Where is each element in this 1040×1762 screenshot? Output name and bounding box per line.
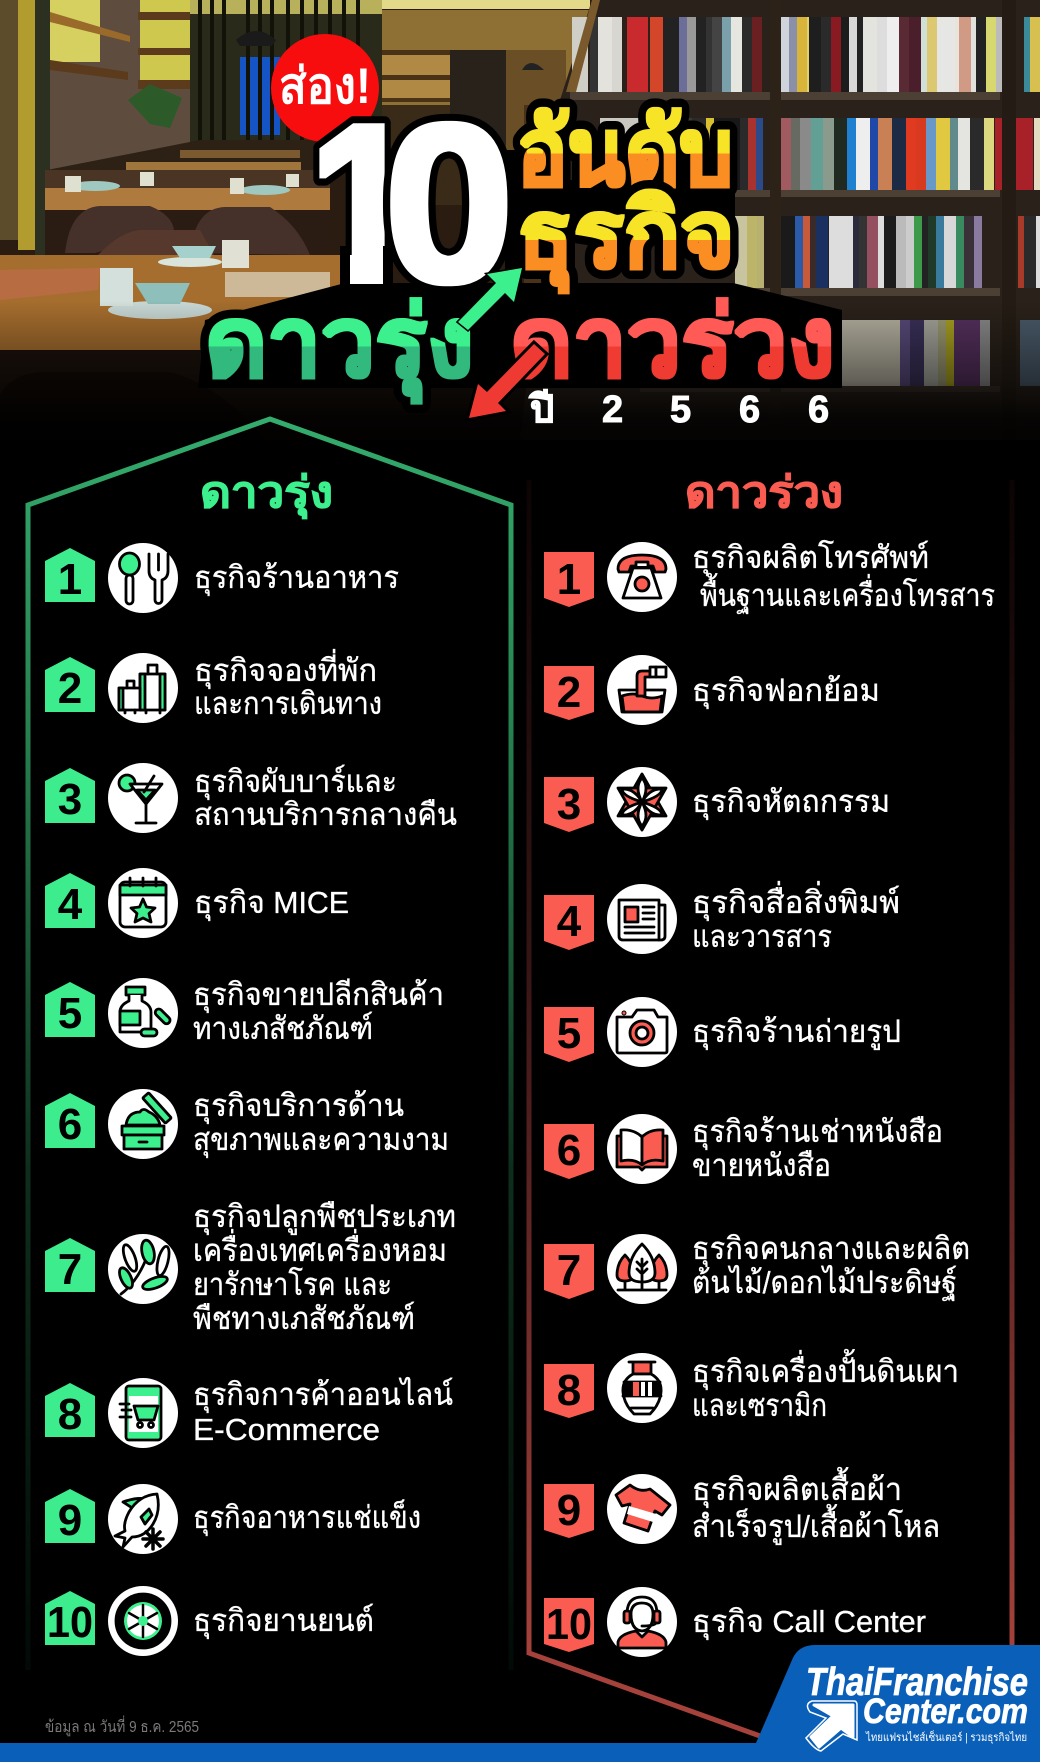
icon: cream jar (108, 1089, 178, 1159)
arrow: down (469, 344, 545, 418)
title: 10: 0 (384, 77, 514, 329)
arrow: up (458, 268, 522, 330)
icon: medicine (108, 978, 178, 1048)
rank badge 10: 10 (546, 1600, 592, 1649)
rank badge 9 (45, 1489, 95, 1545)
rank badge 3 (45, 768, 95, 824)
label: พื้นฐานและเครื่องโทรสาร (700, 573, 995, 614)
icon: newspaper (607, 884, 677, 954)
label: ธุรกิจขายปลีกสินค้า (193, 977, 444, 1014)
rank badge 8 (45, 1383, 95, 1439)
rank badge 2 (45, 657, 95, 713)
rank badge 1 (45, 548, 95, 604)
label (193, 1088, 449, 1159)
panel: falling stars list (544, 540, 995, 1657)
label: และการเดินทาง (194, 686, 382, 721)
item 9 (45, 1484, 421, 1554)
rank badge 6: 6 (58, 1100, 82, 1149)
title: อันดับ: อันดับ (517, 100, 733, 205)
label: ธุรกิจฟอกย้อม (692, 673, 880, 710)
dark fade to black (0, 300, 1040, 490)
item 2 (45, 649, 382, 723)
rank badge 1: 1 (58, 555, 82, 604)
rank badge 5: 5 (557, 1009, 581, 1058)
rank badge 8: 8 (58, 1390, 82, 1439)
rank badge 4: 4 (58, 880, 83, 929)
rank badge 7 (45, 1238, 95, 1294)
label (692, 1467, 940, 1545)
item 9 (544, 1467, 940, 1545)
icon: telephone (607, 542, 677, 612)
label: และเซรามิก (692, 1388, 827, 1423)
footer bar (0, 1645, 1040, 1762)
rank badge 5: 5 (58, 989, 82, 1038)
title: ธุรกิจ: ธุรกิจ (517, 182, 735, 293)
footer bar and logo (0, 1645, 1040, 1762)
icon: herb leaves (108, 1234, 178, 1304)
icon: camera (607, 997, 677, 1067)
icon: vase (607, 1353, 677, 1423)
rank badge 3 (544, 777, 594, 832)
item 8 (45, 1377, 453, 1448)
label: E-Commerce (193, 1412, 380, 1447)
icon: craft flower (607, 767, 677, 837)
item 6 (45, 1088, 449, 1159)
year: 5 (670, 389, 691, 431)
icon: calendar (108, 868, 178, 938)
title: 10: 1 (309, 77, 418, 329)
panel frame: falling stars (529, 480, 1012, 1736)
rank badge 4: 4 (557, 897, 582, 946)
title block (198, 34, 842, 431)
label: ทางเภสัชภัณฑ์ (193, 1011, 373, 1046)
label: ธุรกิจหัตถกรรม (692, 784, 890, 821)
label (692, 540, 995, 614)
heading: ดาวรุ่ง: ดาวรุ่ง (200, 469, 333, 520)
rank badge 6 (544, 1124, 594, 1179)
item 5 (45, 977, 444, 1048)
icon: call center agent (607, 1587, 677, 1657)
item 3 (544, 767, 890, 837)
label (194, 649, 382, 721)
item 5 (544, 997, 901, 1067)
background photo: restaurant and bookshelves (0, 0, 1040, 520)
year: 2 (602, 389, 623, 431)
label (692, 1231, 970, 1301)
label (193, 1377, 453, 1447)
label: ธุรกิจร้านเช่าหนังสือ (692, 1114, 943, 1151)
rank badge 10: 10 (47, 1598, 93, 1647)
item 2 (544, 655, 880, 725)
item 3 (45, 763, 457, 833)
label: ธุรกิจ Call Center (692, 1604, 926, 1641)
label: ธุรกิจ MICE (194, 885, 349, 922)
label: ธุรกิจบริการด้าน (193, 1088, 404, 1125)
rank badge 8 (544, 1364, 594, 1418)
rank badge 2: 2 (58, 664, 82, 713)
rank badge 3: 3 (557, 780, 581, 829)
item 7 (544, 1231, 970, 1304)
rank badge 4 (45, 873, 95, 929)
title: ดาวรุ่ง: ดาวรุ่ง (205, 287, 474, 404)
rank badge 1: 1 (557, 555, 581, 604)
label: ธุรกิจปลูกพืชประเภท (193, 1199, 456, 1236)
item 1 (45, 543, 399, 613)
label: ธุรกิจการค้าออนไลน์ (193, 1377, 453, 1414)
rank badge 6: 6 (557, 1126, 581, 1175)
rank badge 9: 9 (557, 1486, 581, 1535)
rank badge 9: 9 (58, 1496, 82, 1545)
icon: trees (607, 1234, 677, 1304)
rank badge 3: 3 (58, 775, 82, 824)
label: เครื่องเทศเครื่องหอม (193, 1229, 447, 1268)
label: ธุรกิจอาหารแช่แข็ง (193, 1499, 421, 1537)
rank badge 9 (544, 1484, 594, 1538)
label: สถานบริการกลางคืน (194, 797, 457, 832)
label (194, 764, 457, 832)
item 1 (544, 540, 995, 614)
rank badge 7: 7 (58, 1245, 82, 1294)
item 4 (45, 868, 349, 938)
label: ธุรกิจร้านถ่ายรูป (692, 1014, 901, 1051)
label: ธุรกิจผลิตโทรศัพท์ (692, 540, 929, 577)
label (193, 977, 444, 1046)
title: ดาวร่วง: ดาวร่วง (510, 287, 835, 397)
panel frame: rising stars (28, 419, 511, 1670)
item 10 (544, 1587, 926, 1657)
year (528, 389, 829, 431)
rank badge 7 (544, 1244, 594, 1299)
photo: bookshelves (520, 0, 1040, 440)
label: ต้นไม้/ดอกไม้ประดิษฐ์ (692, 1265, 957, 1301)
icon: cocktail (108, 763, 178, 833)
label (193, 1199, 456, 1336)
icon: mobile shopping (108, 1378, 178, 1448)
label: สุขภาพและความงาม (193, 1122, 449, 1159)
label (692, 1114, 943, 1183)
label: ขายหนังสือ (692, 1148, 831, 1183)
title: 10 (313, 114, 508, 286)
rank badge 2 (544, 666, 594, 720)
label: ธุรกิจเครื่องปั้นดินเผา (692, 1349, 959, 1391)
label: ยารักษาโรค และ (193, 1267, 392, 1302)
source note: ข้อมูล ณ วันที่ 9 ธ.ค. 2565 (45, 1715, 199, 1737)
label (692, 1349, 959, 1423)
label: ธุรกิจสื่อสิ่งพิมพ์ (692, 881, 900, 922)
panel: rising stars list (45, 543, 457, 1656)
label: พืชทางเภสัชภัณฑ์ (193, 1301, 415, 1336)
badge: ส่อง! (271, 34, 379, 142)
year: 6 (739, 389, 760, 431)
heading: ดาวร่วง: ดาวร่วง (685, 469, 843, 517)
label (692, 881, 900, 954)
icon: t-shirt (607, 1474, 677, 1544)
label: สำเร็จรูป/เสื้อผ้าโหล (692, 1504, 940, 1545)
rank badge 1 (544, 552, 594, 607)
icon: luggage (108, 653, 178, 723)
icon: spoon and fork (108, 543, 178, 613)
rank badge 5 (544, 1007, 594, 1062)
rank badge 7: 7 (557, 1246, 581, 1295)
label: ธุรกิจร้านอาหาร (194, 560, 399, 597)
rank badge 6 (45, 1093, 95, 1149)
label: ธุรกิจยานยนต์ (193, 1603, 374, 1640)
icon: dye basin (607, 655, 677, 725)
label: ธุรกิจผลิตเสื้อผ้า (692, 1467, 902, 1509)
label: และวารสาร (692, 919, 832, 954)
rank badge 5 (45, 982, 95, 1038)
icon: wheel (108, 1586, 178, 1656)
icon: frozen fish (108, 1484, 178, 1554)
item 7 (45, 1199, 456, 1336)
item 6 (544, 1114, 943, 1184)
title black backing (198, 150, 842, 388)
icon: open book (607, 1114, 677, 1184)
year: ปี (528, 389, 554, 431)
label: ธุรกิจจองที่พัก (194, 649, 377, 690)
rank badge 2: 2 (557, 668, 581, 717)
logo wordmark (806, 1661, 1028, 1744)
year: 6 (808, 389, 829, 431)
badge: ส่อง!: ส่อง! (279, 58, 371, 114)
label: ธุรกิจผับบาร์และ (194, 764, 397, 801)
rank badge 8: 8 (557, 1366, 581, 1415)
rank badge 4 (544, 895, 594, 950)
item 4 (544, 881, 900, 954)
item 8 (544, 1349, 959, 1423)
item 10 (45, 1586, 374, 1656)
photo: restaurant (0, 0, 600, 440)
label: ธุรกิจคนกลางและผลิต (692, 1231, 970, 1268)
logo arrow icon (806, 1701, 857, 1751)
